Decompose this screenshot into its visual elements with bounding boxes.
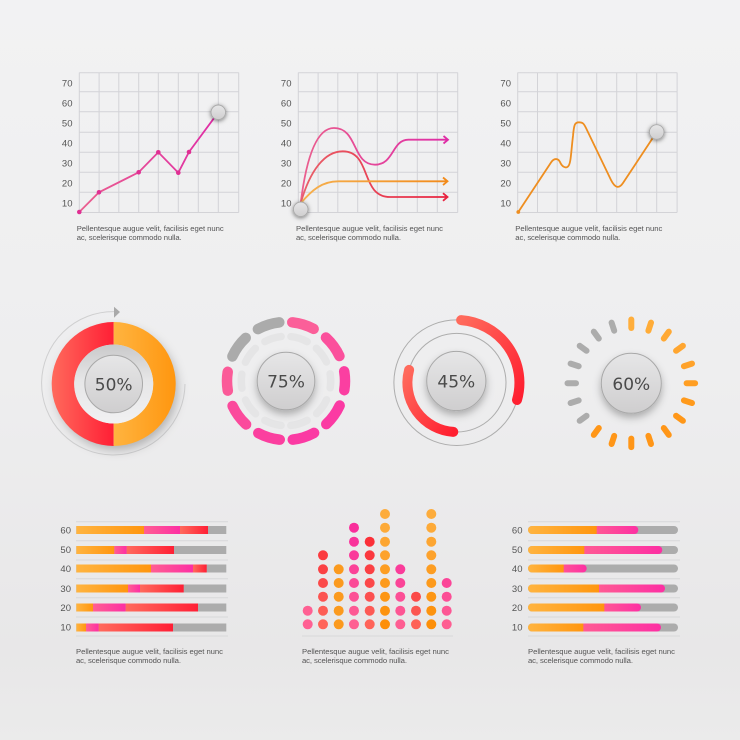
column 4 — [349, 523, 359, 629]
grey ticks — [568, 323, 614, 421]
bar 50 — [76, 546, 226, 554]
y axis labels: 50 — [500, 118, 511, 130]
caption: ac, scelerisque commodo nulla. — [296, 233, 401, 242]
row labels: 20 — [60, 603, 71, 614]
y axis labels: 70 — [62, 78, 72, 90]
bar 30 — [76, 584, 226, 592]
centre button — [257, 352, 315, 410]
caption: Pellentesque augue velit, facilisis eget nunc — [77, 224, 224, 233]
y axis labels: 60 — [500, 98, 511, 110]
progress arc with arrow — [42, 307, 185, 455]
y axis labels: 10 — [62, 198, 72, 210]
caption: ac, scelerisque commodo nulla. — [76, 656, 181, 665]
y axis labels: 40 — [281, 138, 292, 150]
y axis labels: 10 — [281, 198, 292, 210]
row labels: 40 — [512, 564, 522, 575]
row labels — [512, 526, 522, 634]
row labels: 10 — [512, 622, 522, 634]
caption: Pellentesque augue velit, facilisis eget nunc — [296, 224, 443, 233]
bar 10 — [528, 624, 678, 632]
row labels: 30 — [512, 584, 522, 595]
orange half — [114, 322, 176, 446]
inner pale segments — [223, 318, 349, 444]
orange ticks — [594, 320, 695, 447]
column 8 — [411, 592, 421, 629]
red curve — [301, 151, 448, 203]
column 7 — [395, 564, 405, 629]
y axis labels: 10 — [500, 198, 511, 210]
row labels: 20 — [512, 603, 522, 614]
row labels: 30 — [60, 584, 71, 595]
y axis labels: 30 — [62, 158, 72, 170]
y axis labels: 70 — [500, 78, 511, 90]
y axis labels: 30 — [281, 158, 292, 170]
panel: 60% tick ring — [568, 320, 695, 447]
column 2 — [318, 550, 328, 629]
y axis labels — [500, 78, 511, 210]
y axis labels: 60 — [62, 98, 72, 110]
bar 60 — [76, 526, 226, 534]
caption: Pellentesque augue velit, facilisis eget nunc — [76, 647, 223, 656]
grid — [79, 72, 239, 212]
centre button — [601, 353, 661, 413]
y axis labels: 20 — [281, 178, 292, 190]
inner red arc — [407, 370, 453, 432]
pink and grey outer segments — [203, 298, 369, 464]
donut hole — [74, 344, 153, 424]
caption: ac, scelerisque commodo nulla. — [77, 233, 182, 242]
bar 50 — [528, 546, 678, 554]
caption: Pellentesque augue velit, facilisis eget nunc — [528, 647, 675, 656]
orange line — [518, 122, 657, 212]
row labels: 10 — [60, 622, 71, 634]
panel: 45% double ring — [394, 320, 520, 446]
caption: ac, scelerisque commodo nulla. — [528, 656, 633, 665]
row labels — [60, 526, 71, 634]
handle — [293, 202, 308, 217]
value: 75% — [267, 372, 305, 392]
red half — [52, 322, 114, 446]
inner thin ring — [407, 333, 506, 432]
column 10 — [442, 578, 452, 629]
row labels: 50 — [60, 545, 71, 556]
pink line — [77, 112, 218, 214]
bar 30 — [528, 584, 678, 592]
y axis labels: 70 — [281, 78, 292, 90]
grid — [518, 72, 677, 212]
column 3 — [334, 564, 344, 629]
panel: stacked rounded bars — [512, 522, 680, 665]
caption: ac, scelerisque commodo nulla. — [515, 233, 620, 242]
pink curve — [301, 128, 448, 203]
column 5 — [365, 537, 375, 629]
bar 40 — [528, 564, 678, 572]
handle — [649, 125, 664, 139]
panel: multi curve chart — [281, 72, 458, 242]
caption: Pellentesque augue velit, facilisis eget nunc — [515, 224, 662, 233]
y axis labels: 20 — [62, 178, 72, 190]
panel: pink line chart — [62, 72, 239, 242]
y axis labels: 60 — [281, 98, 292, 110]
column 9 — [426, 509, 436, 629]
orange curve — [301, 178, 448, 203]
caption: ac, scelerisque commodo nulla. — [302, 656, 407, 665]
value: 50% — [95, 376, 133, 396]
y axis labels: 40 — [500, 138, 511, 150]
row labels: 60 — [512, 526, 522, 536]
panel: 50% donut — [42, 307, 185, 455]
y axis labels — [281, 78, 292, 210]
y axis labels — [62, 78, 72, 210]
outer thin ring — [394, 320, 520, 446]
bar 40 — [76, 564, 226, 572]
bar 20 — [528, 604, 678, 612]
panel: dot matrix chart — [302, 509, 453, 665]
panel: stacked square bars — [60, 522, 228, 665]
panel: 75% segmented ring — [203, 298, 369, 464]
row labels: 60 — [60, 526, 71, 536]
row labels: 50 — [512, 545, 522, 556]
panel: orange line chart — [500, 72, 677, 242]
y axis labels: 40 — [62, 138, 72, 150]
centre button — [85, 355, 142, 413]
column 1 — [303, 606, 313, 629]
y axis labels: 20 — [500, 178, 511, 190]
donut shadow — [53, 323, 175, 445]
handle — [211, 105, 226, 120]
y axis labels: 30 — [500, 158, 511, 170]
y axis labels: 50 — [62, 118, 72, 130]
outer red arc — [461, 320, 519, 400]
bar 10 — [76, 624, 226, 632]
value: 60% — [612, 375, 650, 395]
y axis labels: 50 — [281, 118, 292, 130]
bar 20 — [76, 604, 226, 612]
bar 60 — [528, 526, 678, 534]
caption: Pellentesque augue velit, facilisis eget nunc — [302, 647, 449, 656]
centre button — [427, 351, 486, 411]
row labels: 40 — [60, 564, 71, 575]
start dot — [516, 210, 520, 214]
value: 45% — [437, 372, 475, 392]
grid — [298, 72, 458, 212]
column 6 — [380, 509, 390, 629]
